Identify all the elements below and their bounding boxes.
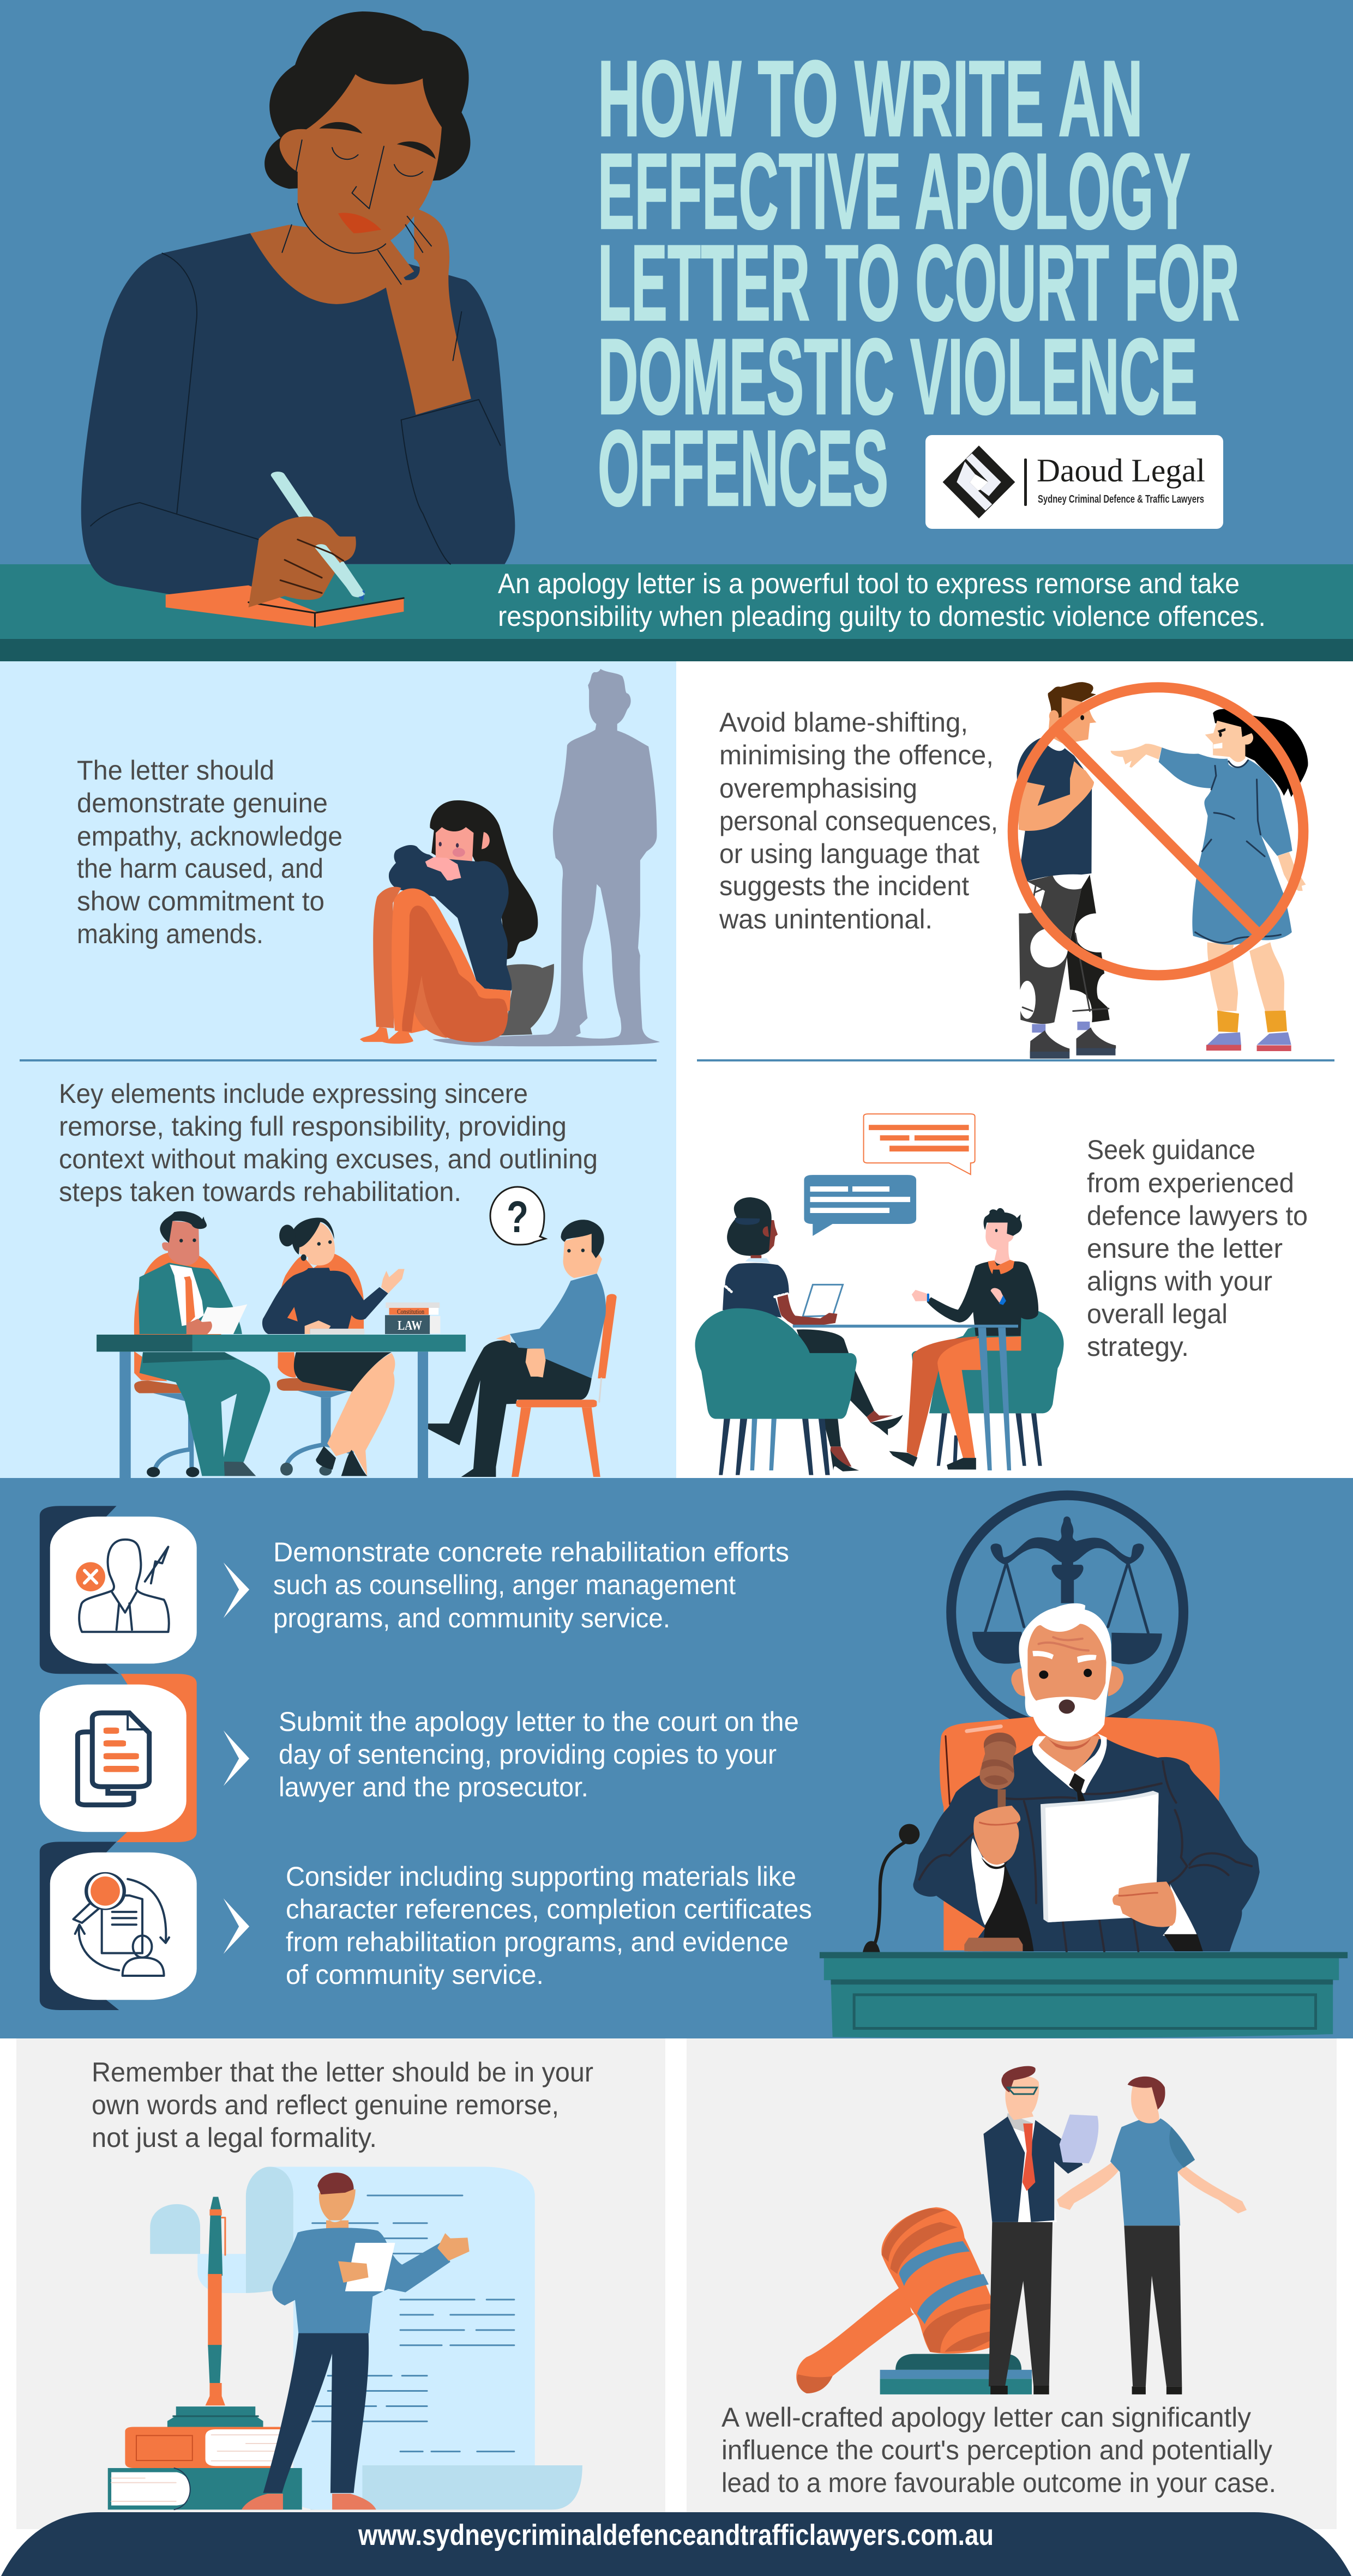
books — [108, 2406, 302, 2509]
intro text — [498, 568, 1266, 632]
text: genuine empathy: The letter should — [77, 755, 274, 786]
man — [242, 2173, 470, 2509]
header teal band — [0, 564, 1353, 639]
prohibition sign — [1013, 687, 1303, 975]
text: remember own words: Remember that the letter should be in your — [92, 2057, 593, 2088]
text: submit the letter: day of sentencing, providing copies to your — [279, 1739, 777, 1770]
text: seek guidance: defence lawyers to — [1087, 1200, 1308, 1231]
intro text: responsibility when pleading guilty to domestic violence offences. — [498, 601, 1266, 632]
text: seek guidance: strategy. — [1087, 1331, 1189, 1362]
panel: light blue left column — [0, 661, 676, 1478]
intro text: An apology letter is a powerful tool to express remorse and take — [498, 568, 1240, 600]
book titles: Constitution — [397, 1307, 424, 1316]
text: supporting materials — [286, 1861, 812, 1990]
panel: grey left card — [16, 2038, 665, 2529]
icon: research and person — [73, 1873, 169, 1976]
logo: Daoud Legal — [925, 435, 1223, 529]
panel: rehabilitation section — [0, 1478, 1353, 2038]
text: supporting materials: Consider including supporting materials like — [286, 1861, 796, 1892]
footer — [1, 2512, 1351, 2576]
text: genuine empathy: show commitment to — [77, 886, 324, 916]
chevrons — [224, 1563, 249, 1954]
text: key elements: remorse, taking full responsibility, providing — [59, 1111, 567, 1142]
illustration: woman writing — [81, 11, 515, 627]
text: avoid blame shifting: minimising the offence, — [719, 740, 994, 770]
text: genuine empathy: the harm caused, and — [77, 853, 323, 884]
panel: header — [0, 0, 1353, 661]
text: well-crafted letter — [721, 2402, 1276, 2498]
illustration: gavel and two men — [796, 2066, 1247, 2394]
logo: Daoud Legal: Daoud Legal — [1037, 453, 1205, 488]
divider left — [20, 1059, 657, 1061]
gavel and sound block — [796, 2207, 1032, 2394]
text: avoid blame shifting: was unintentional. — [719, 904, 933, 934]
text: supporting materials: from rehabilitation programs, and evidence — [286, 1927, 789, 1957]
text: avoid blame shifting: overemphasising — [719, 773, 917, 804]
illustration: sad woman and shadow — [360, 669, 660, 1046]
text: rehabilitation efforts: such as counselling, anger management — [273, 1570, 736, 1600]
header dark band — [0, 639, 1353, 661]
text: seek guidance — [1087, 1135, 1308, 1362]
client — [1057, 2077, 1247, 2394]
text: submit the letter: Submit the apology letter to the court on the — [279, 1706, 799, 1737]
pen — [206, 2197, 225, 2405]
text: supporting materials: character references, completion certificates — [286, 1894, 812, 1925]
text: seek guidance: overall legal — [1087, 1299, 1228, 1329]
divider right — [697, 1059, 1334, 1061]
icon cards — [40, 1506, 249, 2010]
speech bubbles — [804, 1114, 975, 1236]
text: rehabilitation efforts: programs, and community service. — [273, 1603, 670, 1633]
text: rehabilitation efforts — [273, 1537, 789, 1633]
illustration: man with letter scroll — [108, 2167, 582, 2509]
illustration: judge with gavel — [820, 1495, 1348, 2038]
text: key elements: steps taken towards rehabilitation. — [59, 1177, 461, 1207]
text: well-crafted letter: influence the court's perception and potentially — [721, 2435, 1272, 2465]
icon: documents — [77, 1713, 149, 1805]
text: remember own words: own words and reflect genuine remorse, — [92, 2090, 559, 2120]
question bubble: ? — [507, 1192, 528, 1242]
gavel — [979, 1733, 1016, 1811]
footer: www.sydneycriminaldefenceandtrafficlawyers.com.au — [358, 2519, 994, 2551]
text: seek guidance: Seek guidance — [1087, 1135, 1255, 1165]
text: avoid blame shifting: personal consequences, — [719, 806, 998, 836]
illustration: meeting at a table: LAW — [398, 1319, 422, 1333]
title — [598, 38, 1240, 528]
text: submit the letter — [279, 1706, 799, 1802]
text: genuine empathy: empathy, acknowledge — [77, 821, 342, 852]
scales of justice — [972, 1516, 1162, 1664]
illustration: no-blame figures and prohibition sign — [1013, 682, 1308, 1059]
text: avoid blame shifting — [719, 707, 998, 934]
logo mark — [943, 445, 1015, 518]
text: seek guidance: aligns with your — [1087, 1266, 1272, 1296]
title: OFFENCES — [598, 408, 888, 528]
law books — [385, 1302, 440, 1334]
icon: person with warning — [76, 1540, 169, 1632]
text: remember own words — [92, 2057, 593, 2153]
text: avoid blame shifting: suggests the incident — [719, 871, 969, 901]
orange speech bubble — [864, 1114, 975, 1174]
illustration: meeting at a table — [97, 1187, 617, 1478]
text: remember own words: not just a legal formality. — [92, 2122, 377, 2153]
text: genuine empathy — [77, 755, 342, 949]
blue speech bubble — [804, 1175, 916, 1236]
text: key elements: Key elements include expressing sincere — [59, 1078, 528, 1109]
text: submit the letter: lawyer and the prosecutor. — [279, 1772, 588, 1802]
text: seek guidance: ensure the letter — [1087, 1233, 1283, 1264]
text: key elements: context without making excuses, and outlining — [59, 1144, 598, 1174]
text: well-crafted letter: A well-crafted apology letter can significantly — [721, 2402, 1251, 2433]
illustration: lawyer consultation — [695, 1197, 1064, 1475]
text: avoid blame shifting: Avoid blame-shifting, — [719, 707, 968, 738]
text: avoid blame shifting: or using language that — [719, 838, 979, 869]
text: genuine empathy: demonstrate genuine — [77, 788, 328, 818]
logo: Daoud Legal: Sydney Criminal Defence & Traffic Lawyers — [1038, 493, 1204, 505]
podium — [820, 1952, 1348, 2038]
microphone — [863, 1824, 919, 1952]
question bubble — [490, 1187, 545, 1245]
text: rehabilitation efforts: Demonstrate concrete rehabilitation efforts — [273, 1537, 789, 1567]
panel: grey right card — [687, 2038, 1337, 2529]
text: supporting materials: of community service. — [286, 1959, 544, 1990]
text: genuine empathy: making amends. — [77, 919, 263, 949]
text: key elements — [59, 1078, 598, 1207]
lawyer — [983, 2066, 1098, 2394]
text: well-crafted letter: lead to a more favourable outcome in your case. — [721, 2468, 1276, 2498]
text: seek guidance: from experienced — [1087, 1168, 1294, 1198]
